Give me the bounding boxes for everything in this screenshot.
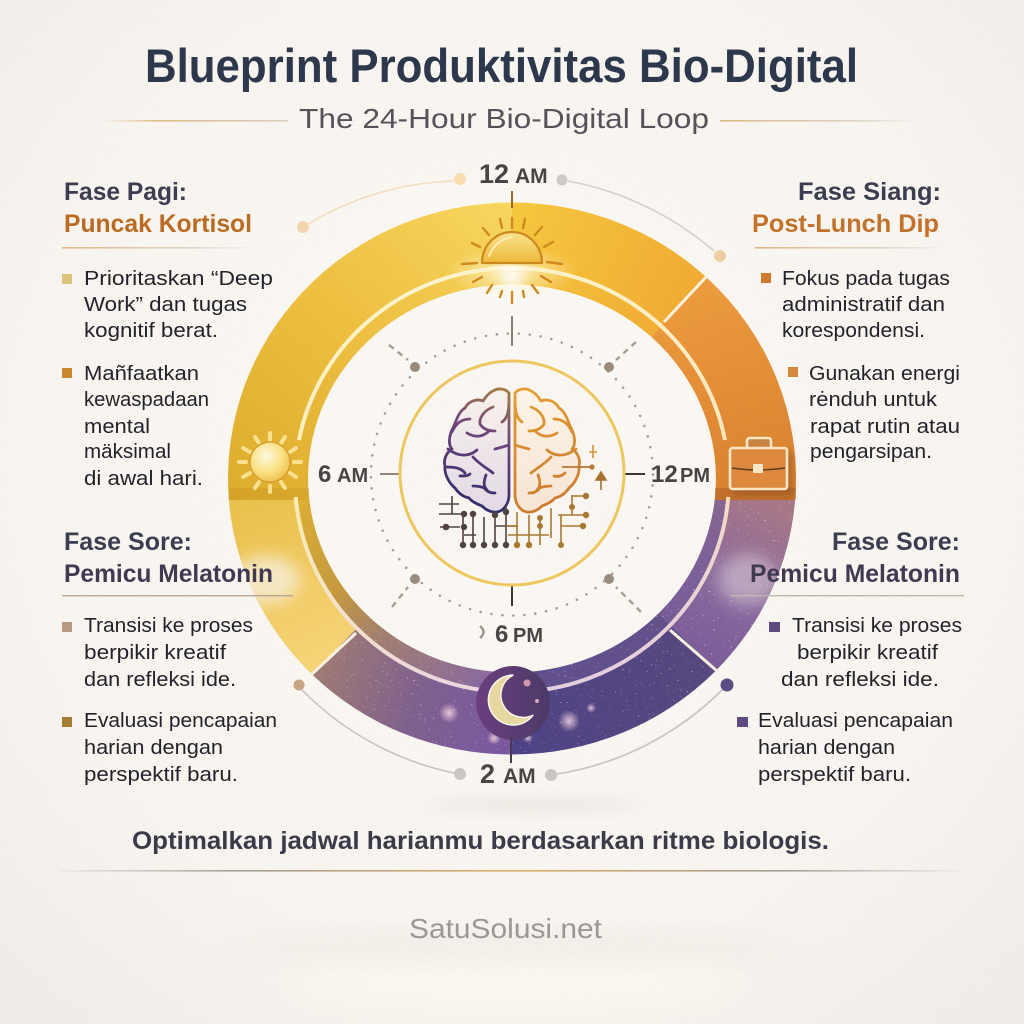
- bullet: evaluation: harian dengan: [84, 737, 223, 759]
- brain right hemisphere: [515, 389, 580, 512]
- label: 6 PM: 6: [495, 621, 508, 648]
- label: 12 AM: 12: [479, 159, 509, 189]
- bullet: evaluation: [62, 710, 277, 786]
- bullet: low energy: Gunakan energi: [809, 363, 960, 385]
- ground shadow under ring: [425, 800, 645, 810]
- bullet: alertness: di awal hari.: [84, 468, 203, 490]
- label: 6 AM: 6: [318, 461, 331, 488]
- icon: rising sun: [446, 218, 578, 303]
- inner strip lower left: [296, 500, 512, 692]
- bottom hand tick: [510, 737, 512, 763]
- segment: evening mauve purple: [658, 500, 795, 670]
- bullet: deep work: kognitif berat.: [84, 320, 218, 342]
- icon: briefcase: [730, 438, 793, 495]
- segment: morning yellow: [228, 202, 512, 500]
- label: 6 AM: AM: [337, 465, 368, 487]
- text halo right: [718, 554, 778, 606]
- circuit traces: [439, 496, 518, 547]
- panel: evening phase right: [730, 528, 964, 786]
- bullet: deep work: [62, 268, 273, 342]
- inner strip lower right: [512, 500, 728, 692]
- segment: afternoon orange: [651, 277, 796, 500]
- bullet: evaluation: Evaluasi pencapaian: [758, 710, 953, 732]
- inner dial: [371, 316, 653, 616]
- node line, sparkle and up arrow: [562, 445, 606, 490]
- base shadow: [232, 940, 792, 956]
- label: 6 PM: PM: [513, 625, 543, 647]
- bullet: creative: berpikir kreatif: [797, 642, 938, 664]
- bullet: low energy: rėnduh untuk: [809, 389, 938, 411]
- title: Blueprint Produktivitas Bio-Digital: [145, 39, 858, 92]
- bullet: alertness: [62, 363, 209, 490]
- bullet: evaluation: perspektif baru.: [758, 764, 911, 786]
- small chevron: [480, 626, 484, 638]
- bullet: evaluation: perspektif baru.: [84, 764, 238, 786]
- label: 2 AM: AM: [503, 765, 536, 788]
- bullet: alertness: kewaspadaan: [84, 389, 209, 411]
- panel: morning phase: [62, 178, 273, 490]
- bullet: admin: [761, 268, 950, 342]
- heading: Post-Lunch Dip: Post-Lunch Dip: [752, 210, 939, 238]
- label: 12 PM: PM: [680, 465, 710, 487]
- bullet: evaluation: [737, 710, 953, 786]
- segment: late morning yellow: [512, 202, 706, 337]
- bullet: creative: [769, 615, 962, 691]
- panel: midday phase: [752, 178, 960, 463]
- bullet: creative: dan refleksi ide.: [84, 669, 236, 691]
- bullet: creative: berpikir kreatif: [84, 642, 226, 664]
- 24-hour ring chart: [228, 202, 800, 760]
- heading: Fase Sore: Fase Sore:: [64, 528, 192, 556]
- bullet: low energy: rapat rutin atau: [810, 416, 960, 438]
- bullet: creative: dan refleksi ide.: [781, 669, 939, 691]
- segment dividers: [311, 276, 717, 675]
- heading: Pemicu Melatonin: Pemicu Melatonin: [750, 560, 960, 588]
- subtitle: The 24-Hour Bio-Digital Loop: [299, 103, 709, 134]
- heading: Pemicu Melatonin: Pemicu Melatonin: [64, 560, 273, 588]
- bullet: alertness: mäksimal: [84, 441, 171, 463]
- segment: night deep purple: [512, 614, 716, 754]
- label: 12 AM: AM: [515, 165, 548, 188]
- bullet: deep work: Work” dan tugas: [84, 294, 247, 316]
- outer guide arcs: [294, 173, 734, 781]
- brand credit: SatuSolusi.net: [409, 913, 602, 944]
- bullet: evaluation: harian dengan: [758, 737, 895, 759]
- segment: pale yellow lower left: [229, 500, 368, 674]
- top hand tick: [511, 191, 513, 208]
- bullet: alertness: mental: [84, 416, 150, 438]
- label: 2 AM: 2: [480, 759, 495, 789]
- bullet: admin: Fokus pada tugas: [782, 268, 950, 290]
- heading: Fase Siang: Fase Siang:: [798, 178, 941, 206]
- hour labels: [318, 159, 710, 789]
- bullet: admin: korespondensi.: [782, 320, 925, 342]
- heading: Fase Sore: Fase Sore:: [832, 528, 960, 556]
- bullet: admin: administratif dan: [782, 294, 945, 316]
- bullet: creative: [62, 615, 253, 691]
- bullet: deep work: Prioritaskan “Deep: [84, 268, 273, 290]
- segment: late night purple: [312, 616, 512, 754]
- cream inner line: [296, 268, 728, 692]
- text halo left: [232, 556, 300, 604]
- panel: evening phase left: [62, 528, 293, 786]
- starfield speckle: [300, 500, 800, 760]
- label: 12 PM: 12: [651, 461, 678, 488]
- bullet: creative: Transisi ke proses: [84, 615, 253, 637]
- shadow band under noon line: [229, 488, 309, 500]
- icon: morning sun: [239, 433, 301, 492]
- bullet: low energy: [788, 363, 960, 463]
- base highlight: [292, 963, 732, 1007]
- bullet: creative: Transisi ke proses: [792, 615, 962, 637]
- brain left hemisphere: [444, 389, 509, 512]
- heading: Puncak Kortisol: Puncak Kortisol: [64, 210, 252, 238]
- bullet: low energy: pengarsipan.: [810, 441, 932, 463]
- bullet: alertness: Mañfaatkan: [84, 363, 199, 385]
- bullet: evaluation: Evaluasi pencapaian: [84, 710, 277, 732]
- icon: crescent moon: [476, 666, 550, 740]
- tagline: Optimalkan jadwal harianmu berdasarkan ritme biologis.: [132, 827, 829, 855]
- icon: brain with circuit: [439, 389, 606, 547]
- heading: Fase Pagi: Fase Pagi:: [64, 178, 187, 206]
